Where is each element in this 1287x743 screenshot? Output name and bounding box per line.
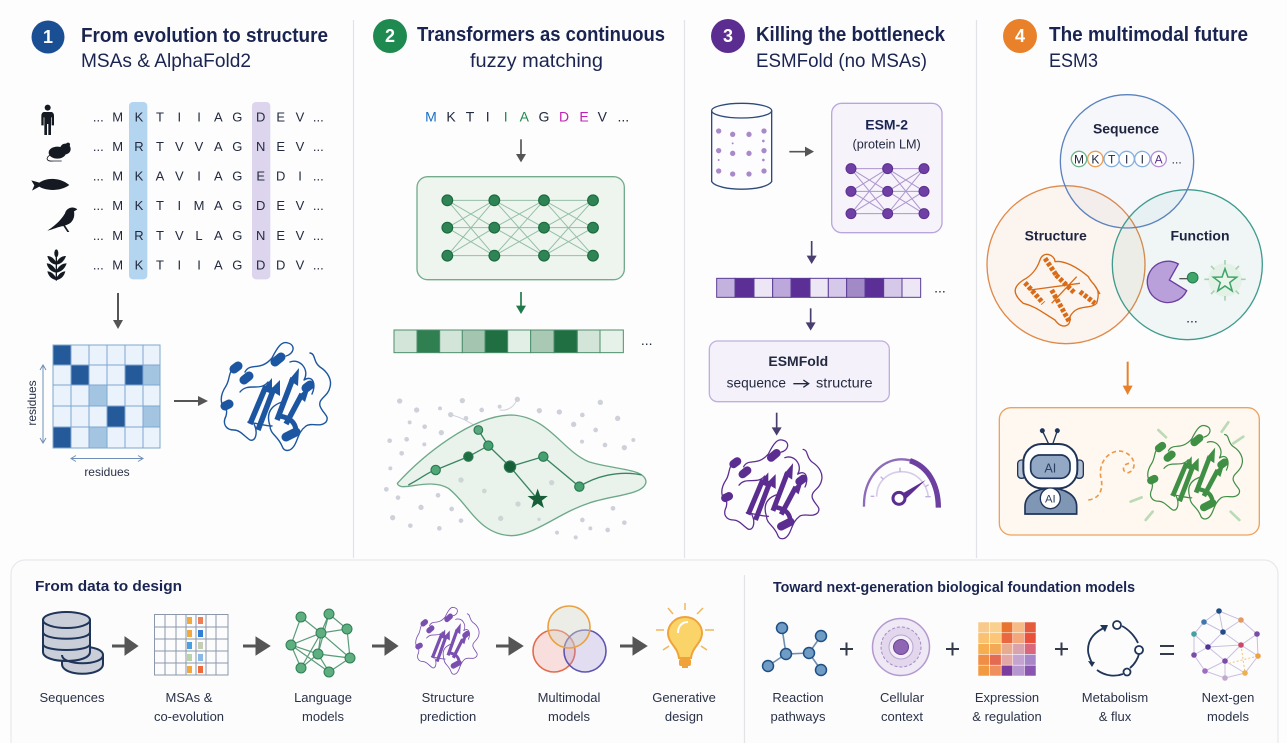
heading 3: 3 (723, 26, 733, 46)
arrow: ESMFold to structure (772, 413, 782, 436)
arrow: modalities to design (1123, 362, 1133, 395)
Sequence label and beads (1071, 120, 1182, 167)
ESM-2 box (832, 103, 942, 233)
item: metabolism and flux (1082, 621, 1148, 724)
panel: killing the bottleneck (709, 19, 946, 539)
step: generative design: Generative (652, 690, 716, 705)
Sequence label and beads: Sequence (1093, 120, 1159, 136)
MSA alignment: ... (313, 169, 324, 184)
MSA alignment: V (296, 228, 305, 243)
input sequence: D (559, 109, 569, 125)
step: structure prediction: prediction (420, 709, 476, 724)
MSA alignment: G (232, 110, 242, 125)
MSA alignment: K (135, 257, 144, 272)
heading 4 (1003, 19, 1248, 72)
MSA alignment: E (256, 169, 265, 184)
design glow rays (1131, 422, 1243, 520)
Sequence label and beads: K (1091, 152, 1099, 166)
heading 1: From evolution to structure (81, 25, 328, 47)
input sequence: I (504, 109, 508, 125)
item: next-gen models: Next-gen (1202, 690, 1254, 705)
MSA alignment: K (135, 110, 144, 125)
Function label: Function (1170, 228, 1230, 244)
MSA alignment: L (195, 228, 203, 243)
MSA alignment: V (175, 169, 184, 184)
axis label: residues vertical: residues (25, 380, 39, 426)
item: reaction pathways (762, 622, 826, 724)
MSA alignment: I (197, 110, 201, 125)
panel: bottom strip (11, 560, 1278, 743)
protein structure: blue (221, 343, 331, 450)
MSA alignment: E (276, 139, 285, 154)
input sequence: V (598, 109, 608, 125)
MSA alignment: A (214, 169, 223, 184)
arrow (372, 639, 396, 653)
step: generative design: design (665, 709, 703, 724)
icon: plant (47, 249, 67, 281)
item: metabolism and flux: & flux (1099, 709, 1132, 724)
MSA alignment: T (156, 139, 164, 154)
icon: enzyme pacman with substrate (1147, 261, 1198, 303)
icon: robot: AI (1045, 493, 1056, 505)
panel: transformers as fuzzy matching (373, 19, 665, 539)
heading 4: 4 (1015, 26, 1025, 46)
MSA alignment: R (134, 139, 144, 154)
heading 4: The multimodal future (1049, 24, 1248, 46)
ellipsis: ... (934, 279, 946, 295)
heading: Toward next-generation biological foundation models (773, 579, 1135, 596)
axis label: residues vertical (25, 365, 46, 443)
heading 3: ESMFold (no MSAs) (756, 51, 927, 72)
input sequence: I (486, 109, 490, 125)
icon: human (41, 105, 54, 135)
step: language models: models (302, 709, 344, 724)
ESMFold box: structure (816, 375, 873, 390)
MSA alignment: G (232, 257, 242, 272)
MSA alignment: I (178, 198, 181, 213)
MSA alignment: I (197, 257, 201, 272)
dashed design path (1088, 451, 1134, 500)
arrow: sequence to network (516, 139, 526, 162)
item: expression and regulation: Expression (975, 690, 1039, 705)
MSA alignment: D (256, 110, 265, 125)
MSA alignment: A (214, 139, 223, 154)
arrow: ESM-2 to embedding (807, 241, 817, 264)
MSA alignment: M (112, 110, 123, 125)
item: cellular context: Cellular (880, 690, 925, 705)
protein structure: purple (722, 440, 822, 539)
arrow (620, 639, 645, 653)
heading 2: 2 (385, 26, 395, 46)
MSA alignment: D (276, 257, 285, 272)
MSA alignment: E (276, 198, 285, 213)
MSA alignment: T (156, 198, 164, 213)
ESM-2 box: ESM-2 (865, 116, 908, 132)
step: multimodal models (533, 606, 606, 724)
MSA alignment: M (112, 228, 123, 243)
heading 1: 1 (43, 27, 53, 47)
arrow: network to embedding (516, 292, 526, 314)
MSA alignment (93, 102, 324, 279)
plus (1055, 642, 1068, 656)
MSA alignment: T (156, 228, 164, 243)
MSA alignment: V (296, 139, 305, 154)
step: sequences: Sequences (39, 690, 105, 705)
MSA alignment: ... (313, 139, 324, 154)
icon: speed gauge (864, 459, 938, 508)
MSA alignment: D (256, 198, 265, 213)
MSA alignment: T (156, 257, 164, 272)
plus (946, 642, 959, 656)
MSA alignment: V (296, 198, 305, 213)
input sequence: ... (618, 109, 629, 125)
ESMFold box: sequence (727, 375, 786, 390)
MSA alignment: ... (93, 110, 104, 125)
heading 3: Killing the bottleneck (756, 24, 946, 46)
step: MSAs and co-evolution: co-evolution (154, 709, 224, 724)
step: multimodal models: models (548, 709, 590, 724)
heading 1 (32, 20, 328, 72)
MSA alignment: ... (93, 198, 104, 213)
MSA alignment: K (135, 169, 144, 184)
MSA alignment: G (232, 139, 242, 154)
arrow: map to structure (174, 396, 208, 406)
MSA alignment: A (214, 257, 223, 272)
MSA alignment: V (195, 139, 204, 154)
MSA alignment: M (112, 169, 123, 184)
input sequence: E (579, 109, 589, 125)
icon: robot: AI (1044, 461, 1056, 475)
MSA alignment: V (296, 110, 305, 125)
MSA alignment: ... (313, 257, 324, 272)
arrow (496, 639, 521, 653)
step: MSAs and co-evolution (154, 614, 228, 724)
ESMFold box (709, 341, 889, 402)
step: language models: Language (294, 690, 352, 705)
MSA alignment: G (232, 169, 242, 184)
icon: target star (528, 489, 548, 508)
heading 4: ESM3 (1049, 51, 1098, 72)
MSA alignment: A (214, 198, 223, 213)
Sequence label and beads: ... (1172, 152, 1182, 166)
MSA alignment: M (112, 139, 123, 154)
item: next-gen models: models (1207, 709, 1249, 724)
item: next-gen models (1191, 608, 1261, 724)
icon: fish (31, 179, 69, 191)
step: language models (286, 609, 355, 724)
protein structure: orange (1015, 254, 1100, 326)
MSA alignment: N (256, 139, 265, 154)
MSA alignment: ... (93, 139, 104, 154)
heading 2: Transformers as continuous (417, 24, 665, 46)
sequence database cylinder (712, 103, 772, 189)
icon: function star (1204, 260, 1246, 301)
MSA alignment: G (232, 228, 242, 243)
MSA alignment: ... (313, 228, 324, 243)
protein structure: green (1148, 425, 1242, 519)
embedding bar (394, 330, 623, 353)
step: structure prediction (416, 607, 479, 724)
arrow: embedding to ESMFold (806, 308, 816, 331)
step: structure prediction: Structure (422, 690, 474, 705)
MSA alignment: N (256, 228, 265, 243)
icon: bird (47, 208, 77, 232)
ellipsis: ... (641, 332, 652, 348)
input sequence: K (446, 109, 456, 125)
MSA alignment: M (112, 257, 123, 272)
MSA alignment: ... (93, 228, 104, 243)
item: reaction pathways: Reaction (772, 690, 824, 705)
heading 2: fuzzy matching (470, 51, 603, 72)
Sequence label and beads: I (1125, 152, 1128, 166)
fitness landscape manifold (397, 415, 646, 536)
generative design box (999, 408, 1259, 535)
step: generative design (652, 603, 716, 724)
input sequence: M (425, 109, 437, 125)
arrow (243, 639, 268, 653)
contact map (53, 345, 160, 448)
item: metabolism and flux: Metabolism (1082, 690, 1148, 705)
heading 1: MSAs & AlphaFold2 (81, 51, 251, 72)
scatter dots (384, 397, 635, 539)
Sequence label and beads: A (1155, 152, 1163, 166)
arrow: alignment to contact map (113, 293, 123, 329)
heading 3 (711, 19, 946, 72)
MSA alignment: ... (93, 169, 104, 184)
MSA alignment: G (232, 198, 242, 213)
ESMFold box: ESMFold (768, 353, 828, 369)
MSA alignment: I (298, 169, 302, 184)
section: next-generation foundation models (762, 579, 1261, 724)
MSA alignment: V (296, 257, 305, 272)
heading: From data to design (35, 578, 182, 595)
MSA alignment: D (276, 169, 285, 184)
arrow: database to ESM-2 (789, 147, 814, 157)
ESM-2 box: (protein LM) (853, 137, 921, 151)
item: expression and regulation: & regulation (972, 709, 1042, 724)
step: sequences (39, 612, 105, 705)
MSA alignment: E (276, 110, 285, 125)
MSA alignment: M (194, 198, 204, 213)
MSA alignment: I (178, 257, 181, 272)
arrow (112, 639, 136, 653)
section: from data to design (35, 578, 716, 724)
panel: the multimodal future (987, 19, 1262, 535)
item: expression and regulation (972, 622, 1042, 724)
plus (840, 642, 853, 656)
item: reaction pathways: pathways (771, 709, 826, 724)
Sequence label and beads: I (1141, 152, 1144, 166)
input sequence: T (466, 109, 475, 125)
Sequence label and beads: T (1108, 152, 1116, 166)
equals (1160, 646, 1174, 654)
heading 2 (373, 19, 665, 72)
embedding bar (717, 278, 921, 297)
MSA alignment: E (276, 228, 285, 243)
icon: robot (1018, 428, 1083, 514)
MSA alignment: ... (93, 257, 104, 272)
MSA alignment: ... (313, 110, 324, 125)
ellipsis: ... (1186, 309, 1198, 325)
step: MSAs and co-evolution: MSAs & (166, 690, 213, 705)
axis label: residues horizontal: residues (84, 465, 130, 479)
MSA alignment: D (256, 257, 265, 272)
MSA alignment: M (112, 198, 123, 213)
input sequence: A (520, 109, 530, 125)
MSA alignment: V (175, 139, 184, 154)
MSA alignment: A (214, 228, 223, 243)
MSA alignment: I (197, 169, 201, 184)
MSA alignment: A (156, 169, 165, 184)
transformer network (417, 177, 624, 280)
Structure label: Structure (1025, 228, 1087, 244)
item: cellular context: context (881, 709, 923, 724)
MSA alignment: I (178, 110, 181, 125)
MSA alignment: T (156, 110, 164, 125)
Venn diagram: sequence structure function (987, 95, 1262, 344)
item: cellular context (872, 618, 930, 724)
icon: mouse (47, 143, 71, 161)
MSA alignment: V (175, 228, 184, 243)
MSA alignment: A (214, 110, 223, 125)
Sequence label and beads: M (1074, 152, 1084, 166)
MSA alignment: K (135, 198, 144, 213)
panel: from evolution to structure (25, 20, 331, 479)
MSA alignment: R (134, 228, 144, 243)
input sequence: G (539, 109, 549, 125)
MSA alignment: ... (313, 198, 324, 213)
step: multimodal models: Multimodal (538, 690, 601, 705)
axis label: residues horizontal (71, 456, 143, 479)
